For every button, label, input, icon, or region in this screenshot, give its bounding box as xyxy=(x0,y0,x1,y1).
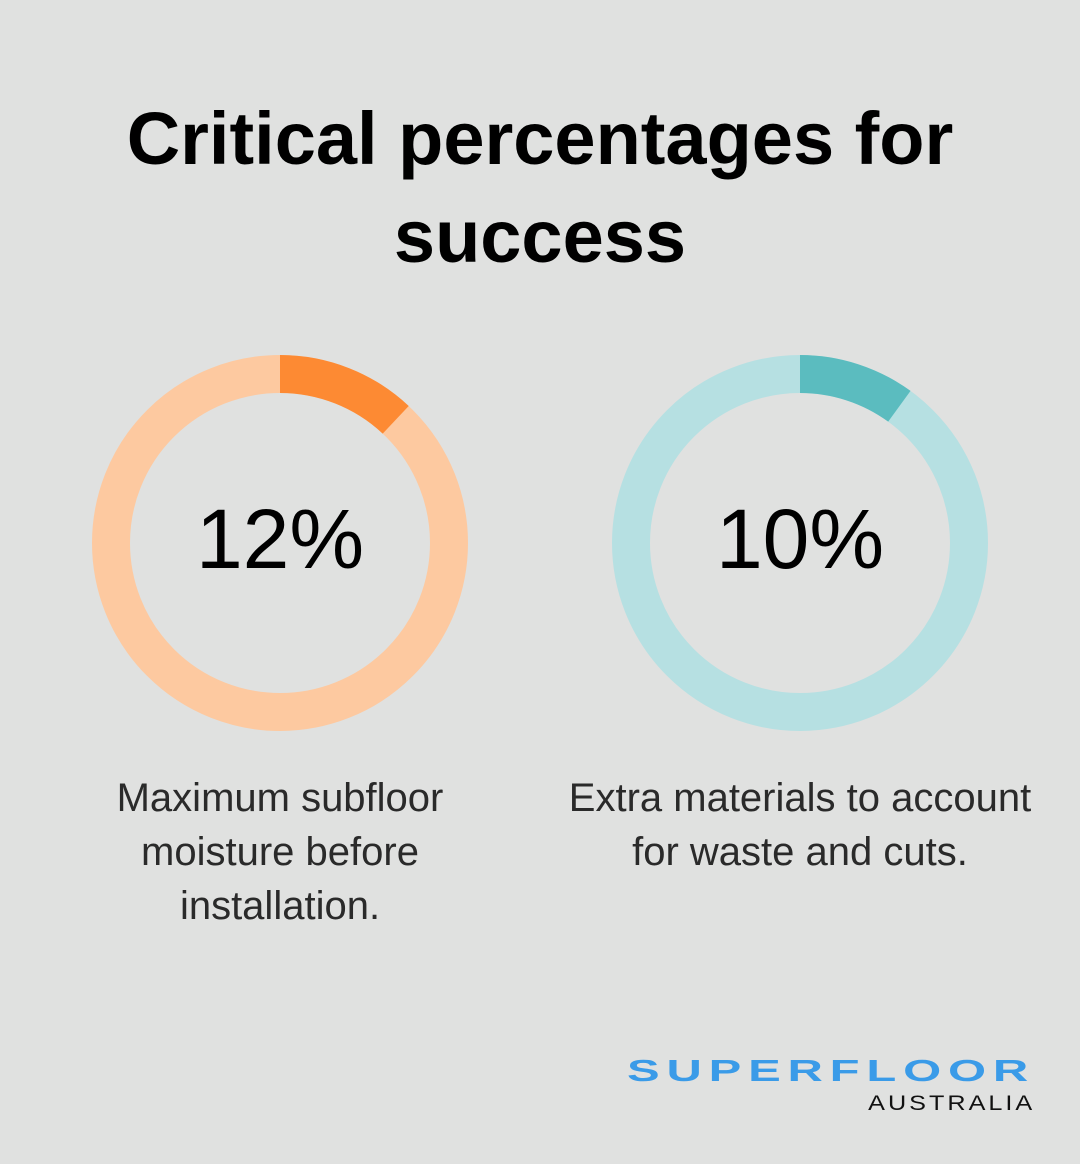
donut: 10% xyxy=(631,374,969,712)
caption: 12%: Maximum subfloor xyxy=(117,776,443,820)
caption: 12%: moisture before xyxy=(141,830,419,874)
title: Critical percentages for xyxy=(127,97,953,180)
logo: SUPERFLOOR xyxy=(627,1053,1035,1088)
donut: 12%: 12% xyxy=(196,492,364,586)
caption: 12%: installation. xyxy=(180,884,380,928)
caption: 12% xyxy=(117,776,443,928)
title xyxy=(127,97,953,278)
donut: 12% xyxy=(111,374,449,712)
title: success xyxy=(394,195,686,278)
logo: AUSTRALIA xyxy=(868,1092,1035,1115)
donut: 10%: 10% xyxy=(716,492,884,586)
logo xyxy=(627,1053,1035,1115)
caption: 10%: Extra materials to account xyxy=(569,776,1031,820)
caption: 10%: for waste and cuts. xyxy=(632,830,968,874)
caption: 10% xyxy=(569,776,1031,874)
